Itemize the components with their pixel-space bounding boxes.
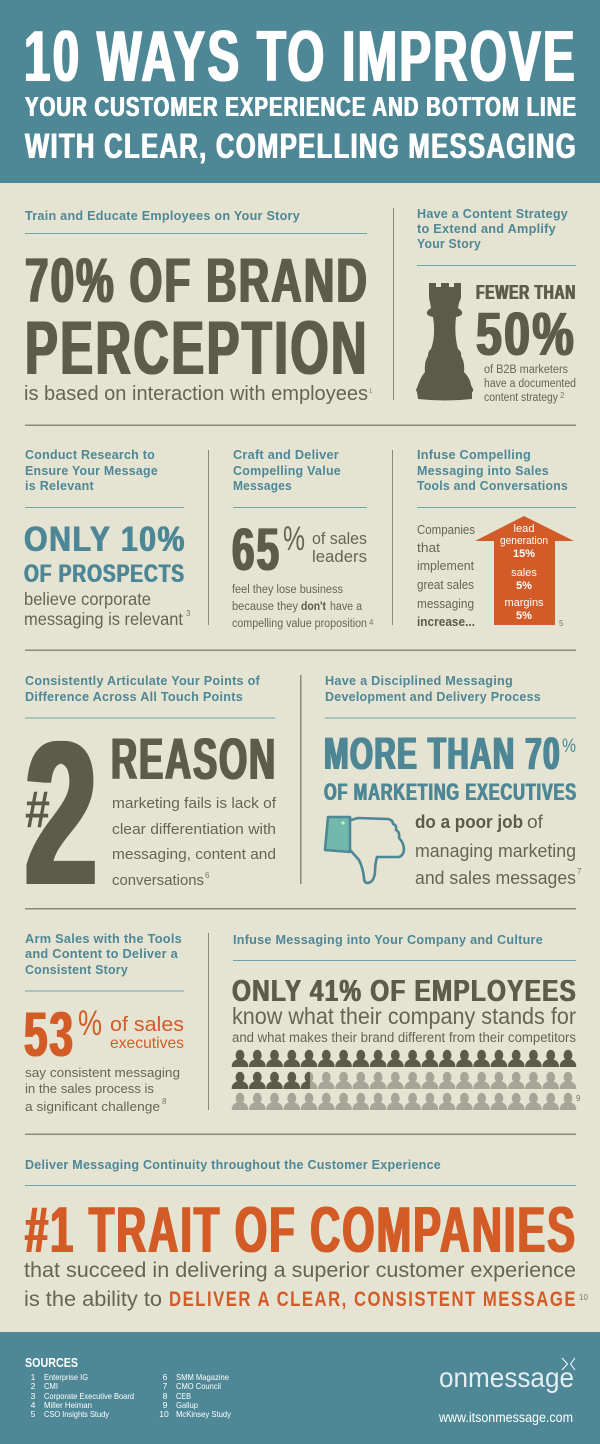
heading: Craft and Deliver — [233, 448, 339, 462]
body line 2: is the ability to — [24, 1288, 162, 1311]
sources column 1: Corporate Executive Board — [44, 1391, 134, 1401]
body text: that — [417, 540, 440, 555]
heading: Infuse Compelling — [417, 448, 531, 462]
body text: say consistent messaging — [25, 1065, 180, 1080]
body text — [417, 522, 475, 629]
heading: Consistently Articulate Your Points of — [25, 674, 261, 688]
heading: Development and Delivery Process — [325, 690, 541, 704]
body text — [415, 812, 582, 888]
arrow: growth figures: margins — [504, 597, 544, 609]
footnote 9: 9 — [576, 1094, 581, 1103]
sources column 1: 4 — [31, 1400, 36, 1410]
body text: conversations — [112, 872, 204, 889]
percent sign: % — [562, 736, 576, 757]
sources heading: SOURCES — [25, 1355, 78, 1370]
footer — [0, 1332, 600, 1444]
body text: marketing fails is lack of — [112, 795, 277, 812]
body text: increase... — [417, 614, 475, 629]
heading: Tools and Conversations — [417, 479, 568, 493]
body text: great sales — [417, 577, 474, 592]
body text: in the sales process is — [25, 1081, 154, 1096]
body text — [484, 364, 576, 404]
icon: thumbs down — [325, 817, 404, 883]
and what makes their brand different: and what makes their brand different from their competitors — [232, 1030, 576, 1045]
body text: content strategy — [484, 392, 558, 404]
arrow: growth figures: sales — [511, 567, 537, 579]
of sales executives — [110, 1014, 184, 1052]
heading — [25, 932, 182, 977]
hash mark: # — [25, 781, 50, 839]
body text: 3 — [186, 609, 191, 618]
53: 53 — [24, 1000, 75, 1070]
panel: messaging continuity — [24, 1158, 588, 1311]
body text: implement — [417, 558, 474, 573]
website: www.itsonmessage.com — [438, 1410, 573, 1425]
body text — [232, 584, 374, 630]
65: 65 — [232, 516, 281, 583]
body text: 2 — [560, 391, 565, 400]
icon: chess rook — [416, 283, 473, 400]
heading — [417, 207, 568, 251]
body text: messaging, content and — [112, 846, 276, 863]
heading — [325, 674, 541, 704]
heading: Consistent Story — [25, 963, 128, 977]
percent sign: % — [283, 520, 305, 558]
body text: is based on interaction with employees — [24, 383, 368, 405]
body text: believe corporate — [24, 589, 151, 609]
logo: onmessage — [439, 1362, 574, 1393]
of prospects: OF PROSPECTS — [24, 560, 185, 588]
body text: clear differentiation with — [112, 821, 276, 838]
body text: 6 — [205, 871, 210, 880]
sources column 2: CMO Council — [176, 1381, 221, 1391]
panel: points of difference — [25, 674, 277, 928]
of sales executives: executives — [110, 1035, 184, 1052]
heading: Deliver Messaging Continuity throughout the Customer Experience — [25, 1158, 441, 1172]
body text: a significant challenge — [25, 1099, 160, 1114]
sources column 1: CMI — [44, 1381, 58, 1391]
body text: messaging — [417, 596, 474, 611]
body text: messaging is relevant — [24, 609, 183, 629]
body text: and sales messages — [415, 868, 576, 888]
heading: Difference Across All Touch Points — [25, 690, 243, 704]
footnote 1: 1 — [369, 389, 373, 395]
body text: of — [527, 812, 544, 832]
sources column 2: 6 — [163, 1372, 168, 1382]
headline 70% of brand: 70% OF BRAND — [25, 246, 369, 316]
heading: Conduct Research to — [25, 448, 155, 462]
of sales leaders: leaders — [312, 547, 367, 566]
body text: of B2B marketers — [484, 364, 568, 376]
heading: is Relevant — [25, 479, 95, 493]
only 10%: ONLY 10% — [24, 520, 186, 559]
arrow: growth figures: 5% — [516, 580, 532, 592]
of sales leaders — [312, 529, 367, 566]
sources column 2: 10 — [159, 1409, 169, 1419]
header banner — [0, 0, 600, 183]
big number 2: 2 — [25, 699, 97, 928]
panel: value messages — [232, 448, 374, 630]
percent sign: % — [78, 1004, 102, 1043]
sources column 1: 5 — [31, 1409, 36, 1419]
heading — [233, 448, 341, 493]
body text: managing marketing — [415, 841, 576, 861]
heading: Train and Educate Employees on Your Story — [25, 209, 300, 223]
body line 1: that succeed in delivering a superior customer experience — [24, 1259, 576, 1282]
heading: and Content to Deliver a — [25, 947, 179, 961]
body text: have a — [330, 601, 363, 613]
panel: company and culture — [232, 933, 581, 1110]
body text: 4 — [369, 618, 374, 627]
panel: sales tools — [417, 448, 576, 629]
sources column 2 — [159, 1372, 232, 1419]
heading: Your Story — [417, 237, 481, 251]
sources column 1: 1 — [31, 1372, 36, 1382]
body text: do a poor job — [415, 812, 523, 832]
heading: to Extend and Amplify — [417, 222, 556, 236]
heading: Have a Disciplined Messaging — [325, 674, 513, 688]
footnote 10: 10 — [579, 1293, 588, 1302]
heading — [417, 448, 568, 493]
heading: Have a Content Strategy — [417, 207, 568, 221]
body text: Companies — [417, 522, 475, 537]
footnote 5: 5 — [559, 619, 564, 628]
sources column 1: CSO Insights Study — [44, 1409, 110, 1419]
body text — [24, 589, 191, 629]
sources column 2: McKinsey Study — [176, 1409, 232, 1419]
body text — [112, 795, 277, 889]
sources column 2: 8 — [163, 1391, 168, 1401]
know what their company stands for: know what their company stands for — [232, 1003, 576, 1029]
arrow: growth figures: 5% — [516, 610, 532, 622]
sources column 2: CEB — [176, 1391, 191, 1401]
arrow: growth figures — [475, 516, 574, 625]
arrow: growth figures: lead — [514, 523, 534, 535]
sources column 2: Gallup — [176, 1400, 198, 1410]
heading: Messaging into Sales — [417, 464, 549, 478]
body text: 8 — [162, 1097, 167, 1106]
reason: REASON — [111, 727, 277, 792]
sources column 1 — [31, 1372, 134, 1419]
heading: Ensure Your Message — [25, 464, 158, 478]
body text: feel they lose business — [232, 584, 343, 596]
arrow: growth figures: 15% — [513, 548, 535, 560]
of sales executives: of sales — [110, 1014, 184, 1036]
heading: Arm Sales with the Tools — [25, 932, 182, 946]
body text: 7 — [577, 867, 582, 876]
arrow: growth figures: generation — [500, 535, 548, 547]
panel: content strategy — [416, 207, 576, 404]
body text — [25, 1065, 180, 1114]
heading: Infuse Messaging into Your Company and Culture — [233, 933, 543, 947]
heading — [25, 674, 261, 704]
sources column 2: 9 — [163, 1400, 168, 1410]
sources column 2: SMM Magazine — [176, 1372, 229, 1382]
of sales leaders: of sales — [312, 529, 367, 548]
pictogram: 41 of 100 employees — [232, 1050, 576, 1110]
panel: conduct research — [24, 448, 191, 629]
heading: Messages — [233, 479, 292, 493]
sources column 2: 7 — [163, 1381, 168, 1391]
sources column 1: Enterprise IG — [44, 1372, 88, 1382]
sources column 1: Miller Heiman — [44, 1400, 92, 1410]
heading: Compelling Value — [233, 464, 341, 478]
body text: compelling value proposition — [232, 618, 367, 630]
sources column 1: 2 — [31, 1381, 36, 1391]
body text: have a documented — [484, 378, 576, 390]
headline perception: PERCEPTION — [25, 306, 369, 391]
sources column 1: 3 — [31, 1391, 36, 1401]
panel: train and educate employees — [24, 209, 373, 405]
body text: because they — [232, 601, 298, 613]
panel: arm sales — [24, 932, 184, 1114]
panel: disciplined process — [324, 674, 582, 888]
body text: don't — [301, 601, 326, 613]
heading — [25, 448, 158, 493]
